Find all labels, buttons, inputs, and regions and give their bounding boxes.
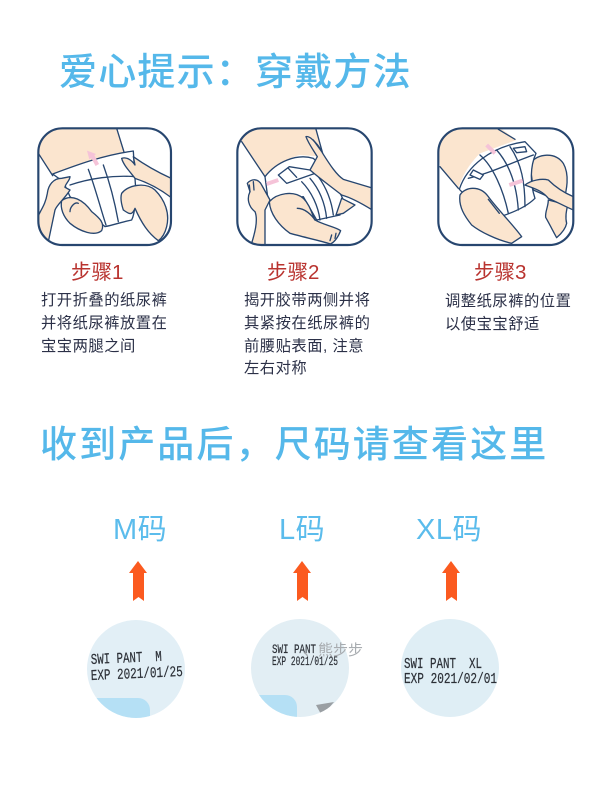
photo: M size code: EXP 2021/01/25 <box>90 664 183 685</box>
photo: L size code: EXP 2021/01/25 <box>272 654 338 669</box>
arrow: L size <box>293 561 311 601</box>
label: XL size: XL码 <box>416 514 482 546</box>
photo: M size code: SWI PANT M <box>90 649 162 669</box>
label: M size: M码 <box>113 514 167 546</box>
text: step 1 instructions <box>41 292 167 355</box>
illustrations and size circles <box>37 127 574 718</box>
text: step 2 instructions: 左右对称 <box>244 360 307 377</box>
text: step 3 instructions: 调整纸尿裤的位置 <box>445 293 571 310</box>
photo: L size code: SWI PANT <box>272 642 316 657</box>
title: care tip wearing method: 爱心提示：穿戴方法 <box>59 52 412 94</box>
icon: step 2 illustration <box>237 127 373 248</box>
heading: step 3: 步骤3 <box>474 261 526 284</box>
text: step 1 instructions: 并将纸尿裤放置在 <box>41 315 167 332</box>
text: step 2 instructions <box>244 292 370 377</box>
icon: step 3 illustration <box>437 127 575 245</box>
text: step 3 instructions <box>445 292 571 333</box>
photo: L size code: 、熊步步 <box>303 642 363 659</box>
text: step 1 instructions: 宝宝两腿之间 <box>41 338 136 355</box>
photo: XL size code: SWI PANT XL <box>404 656 482 673</box>
photo: M size code <box>87 620 185 718</box>
text: step 2 instructions: 揭开胶带两侧并将 <box>244 292 370 309</box>
arrow: M size <box>129 561 147 601</box>
label: L size: L码 <box>279 514 325 546</box>
text: step 2 instructions: 其紧按在纸尿裤的 <box>244 315 370 332</box>
heading: step 1: 步骤1 <box>71 261 123 284</box>
arrow: XL size <box>442 561 460 601</box>
title: check size here: 收到产品后，尺码请查看这里 <box>40 424 548 465</box>
photo: L size code <box>251 619 362 717</box>
icon: step 1 illustration <box>33 127 173 245</box>
heading: step 2: 步骤2 <box>267 261 319 284</box>
text: step 2 instructions: 前腰贴表面, 注意 <box>244 338 364 355</box>
photo: XL size code <box>401 619 499 717</box>
photo: XL size code: EXP 2021/02/01 <box>404 671 497 688</box>
text: step 1 instructions: 打开折叠的纸尿裤 <box>41 292 167 309</box>
text: step 3 instructions: 以使宝宝舒适 <box>445 316 540 333</box>
